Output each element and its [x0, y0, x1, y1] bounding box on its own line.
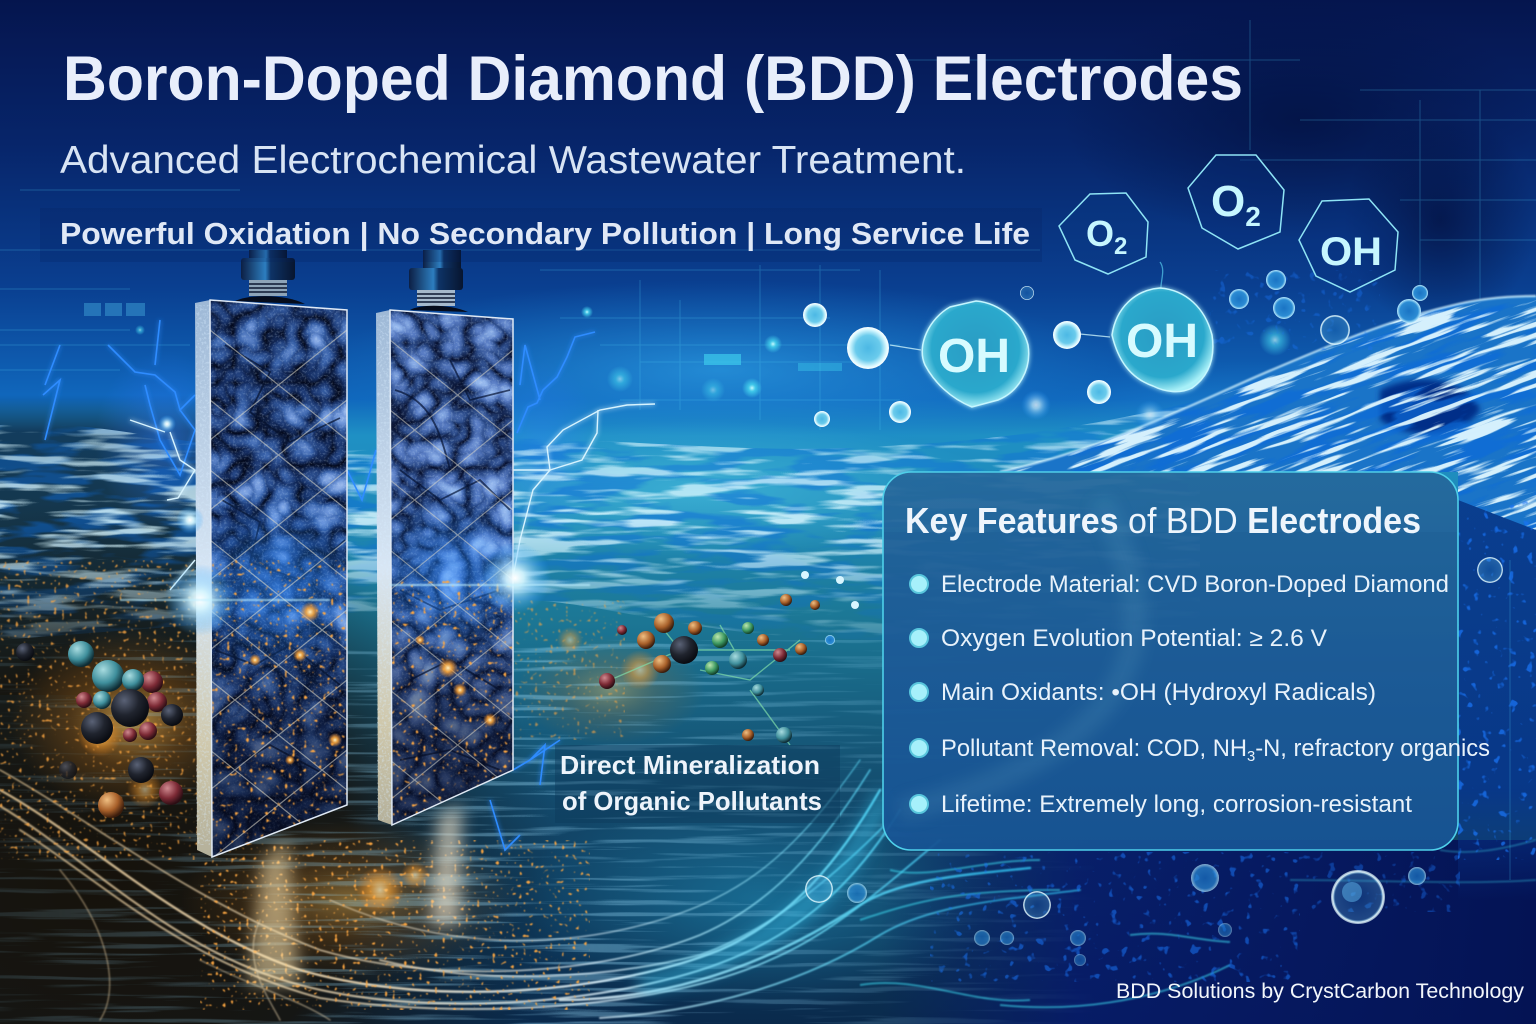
feature: electrode material: Electrode Material: CVD Boron-Doped Diamond	[941, 571, 1449, 598]
electrode side edge	[376, 310, 392, 825]
molecule links	[890, 262, 1163, 350]
molecule: left pollutant cluster	[16, 641, 183, 818]
electrode glow flares	[120, 415, 590, 985]
credit line: BDD Solutions by CrystCarbon Technology	[1116, 980, 1524, 1003]
electrode border	[210, 300, 347, 857]
octagon: O2 top	[1188, 155, 1284, 249]
caption: direct mineralization: of Organic Pollutants	[562, 786, 822, 816]
main swoosh band	[0, 760, 1080, 1020]
right electrode	[376, 250, 517, 860]
electrode cap	[409, 250, 468, 312]
electrode cap	[235, 250, 305, 304]
feature: lifetime: Lifetime: Extremely long, corrosion-resistant	[941, 791, 1412, 818]
feature: pollutant removal: Pollutant Removal: COD, NH	[941, 735, 1250, 762]
subtitle: Advanced Electrochemical Wastewater Treatment.	[60, 139, 966, 182]
bubble: OH large left: OH	[938, 330, 1010, 383]
octagon: O2 top: 2	[1245, 201, 1261, 232]
bubble: OH large left	[922, 301, 1029, 407]
feature: pollutant removal: 3	[1247, 748, 1255, 765]
caption: direct mineralization	[555, 745, 840, 823]
electrode crystalline face	[210, 300, 346, 856]
panel heading: Key Features of BDD Electrodes	[905, 500, 1421, 541]
bubble: OH large right: OH	[1126, 315, 1198, 368]
glowing tech dots and bars	[84, 303, 1367, 402]
electrode border	[390, 310, 513, 825]
lightning arcs	[43, 320, 655, 850]
feature: oxygen evolution potential: Oxygen Evolution Potential: ≥ 2.6 V	[941, 625, 1327, 652]
bubble texture	[930, 270, 1536, 982]
lower bubbles	[805, 557, 1503, 966]
feature: pollutant removal: -N, refractory organics	[1255, 735, 1490, 762]
small rising bubbles	[803, 270, 1428, 430]
electrode crystalline face	[390, 310, 512, 824]
tagline: Powerful Oxidation | No Secondary Pollution | Long Service Life	[60, 216, 1030, 251]
electrode side edge	[195, 300, 212, 857]
panel: key features	[883, 472, 1490, 850]
tagline backing strip	[40, 208, 1042, 262]
title: Boron-Doped Diamond (BDD) Electrodes	[63, 44, 1243, 114]
lower right teal streaks	[860, 840, 1536, 1007]
octagon: OH right: OH	[1320, 230, 1382, 274]
bubble: OH large right	[1112, 288, 1213, 392]
octagon: OH right	[1299, 199, 1398, 292]
octagon: O2 top: O	[1211, 177, 1245, 226]
rising right wave	[1006, 296, 1536, 530]
amber sparks	[0, 560, 660, 1010]
octagon: O2 left	[1059, 193, 1148, 274]
feature: main oxidants: Main Oxidants: •OH (Hydroxyl Radicals)	[941, 679, 1376, 706]
octagon: O2 left: O	[1086, 213, 1114, 254]
caption: direct mineralization: Direct Mineralization	[560, 750, 820, 780]
feature: pollutant removal	[910, 735, 1490, 765]
left electrode	[195, 250, 355, 865]
molecule: right pollutant cluster	[599, 571, 859, 745]
octagon: O2 left: 2	[1114, 233, 1127, 260]
